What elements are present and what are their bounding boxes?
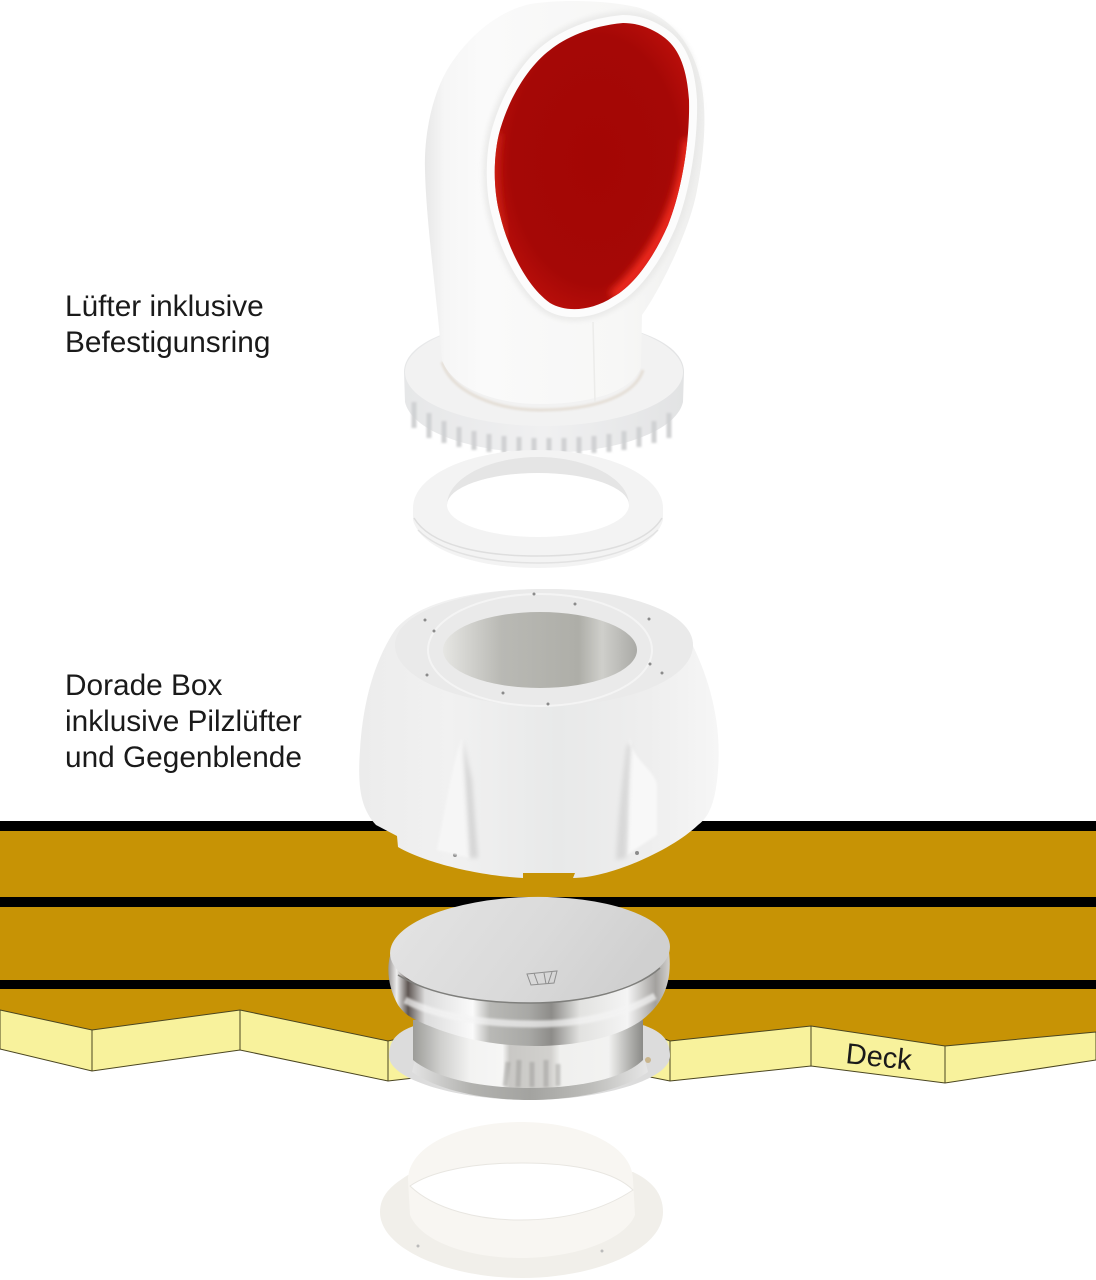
right rib xyxy=(627,738,657,855)
flange xyxy=(389,1015,670,1100)
hood and neck body xyxy=(425,1,704,404)
cowl vent with fastening ring xyxy=(404,1,704,454)
label: Deck: Deck xyxy=(844,1038,914,1077)
stainless mushroom cap xyxy=(388,893,671,1100)
label: Lüfter: Lüfter inklusive xyxy=(65,290,264,323)
neck seam xyxy=(593,322,595,402)
right rib shade xyxy=(616,745,631,860)
red opening xyxy=(494,23,689,309)
collar reflection xyxy=(505,1060,558,1087)
top plate xyxy=(395,589,693,706)
box opening xyxy=(443,612,637,688)
deck cross-section background xyxy=(0,821,1096,1083)
black stripe 2 xyxy=(0,897,1096,907)
gold deck layers xyxy=(0,821,1096,1046)
yellow deck edge xyxy=(0,1010,1096,1083)
left rib shade xyxy=(463,740,478,858)
ring opening xyxy=(447,473,629,537)
black stripe 1 xyxy=(0,821,1096,831)
cap top xyxy=(389,893,671,1007)
label: Dorade Box: Dorade Box xyxy=(65,669,222,702)
logo xyxy=(527,971,557,985)
cap front edge xyxy=(398,968,660,1003)
label: Dorade Box: und Gegenblende xyxy=(65,741,302,774)
ring opening xyxy=(410,1163,633,1220)
fastening ring xyxy=(404,318,684,454)
rim bright band xyxy=(405,996,655,1024)
cap rim xyxy=(388,945,670,1046)
black stripe 3 xyxy=(0,980,1096,989)
lower trim ring xyxy=(380,1122,663,1278)
collar xyxy=(413,1020,643,1088)
label: Lüfter: Befestigunsring xyxy=(65,326,270,359)
label: Dorade Box: inklusive Pilzlüfter xyxy=(65,705,302,738)
Dorade box xyxy=(359,589,719,878)
screw holes xyxy=(424,592,664,857)
left rib xyxy=(437,738,470,858)
threaded mounting ring xyxy=(413,450,663,568)
lip shadow xyxy=(495,23,689,309)
white lip xyxy=(495,23,689,309)
